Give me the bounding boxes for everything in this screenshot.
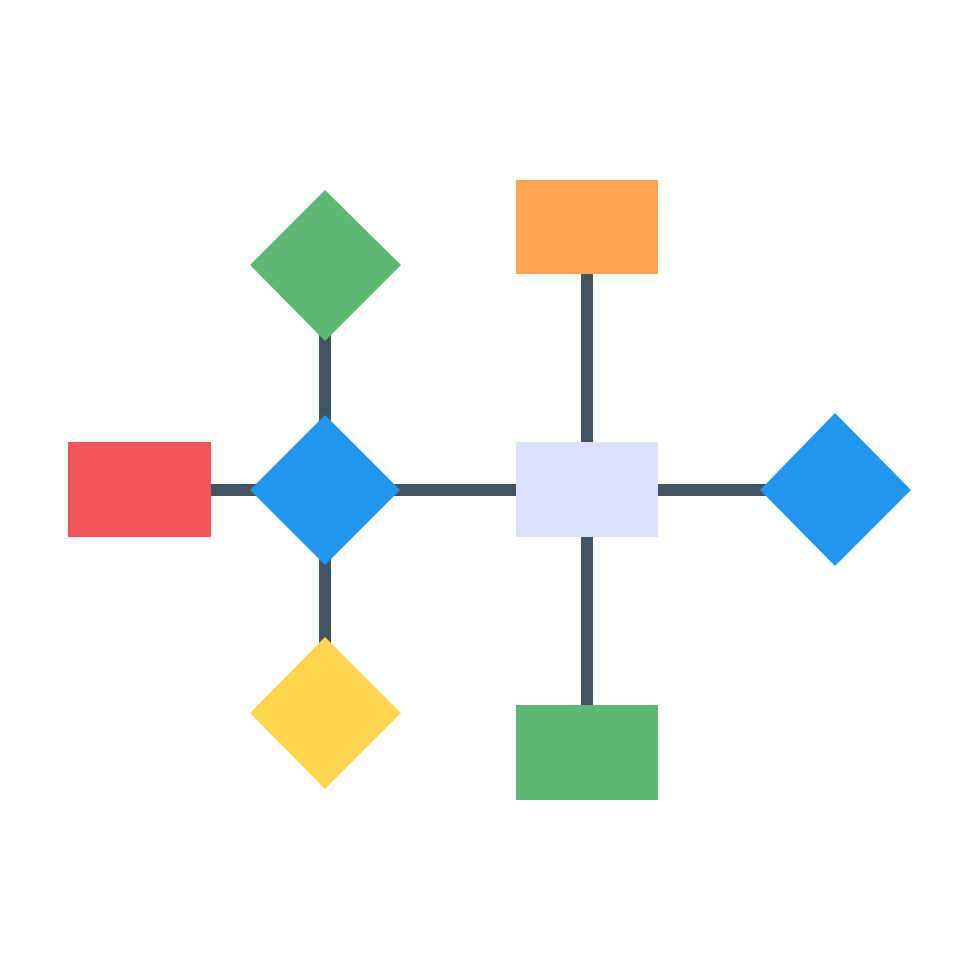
node: blue center diamond [250, 415, 400, 565]
node: orange rectangle [516, 180, 658, 274]
connector lines [205, 270, 770, 710]
node: green top diamond [250, 190, 401, 341]
node: lavender center rectangle [516, 442, 658, 537]
node: red rectangle [68, 442, 211, 537]
node: blue right diamond [760, 413, 911, 566]
node: green bottom rectangle [516, 705, 658, 800]
node: yellow bottom diamond [250, 637, 401, 789]
